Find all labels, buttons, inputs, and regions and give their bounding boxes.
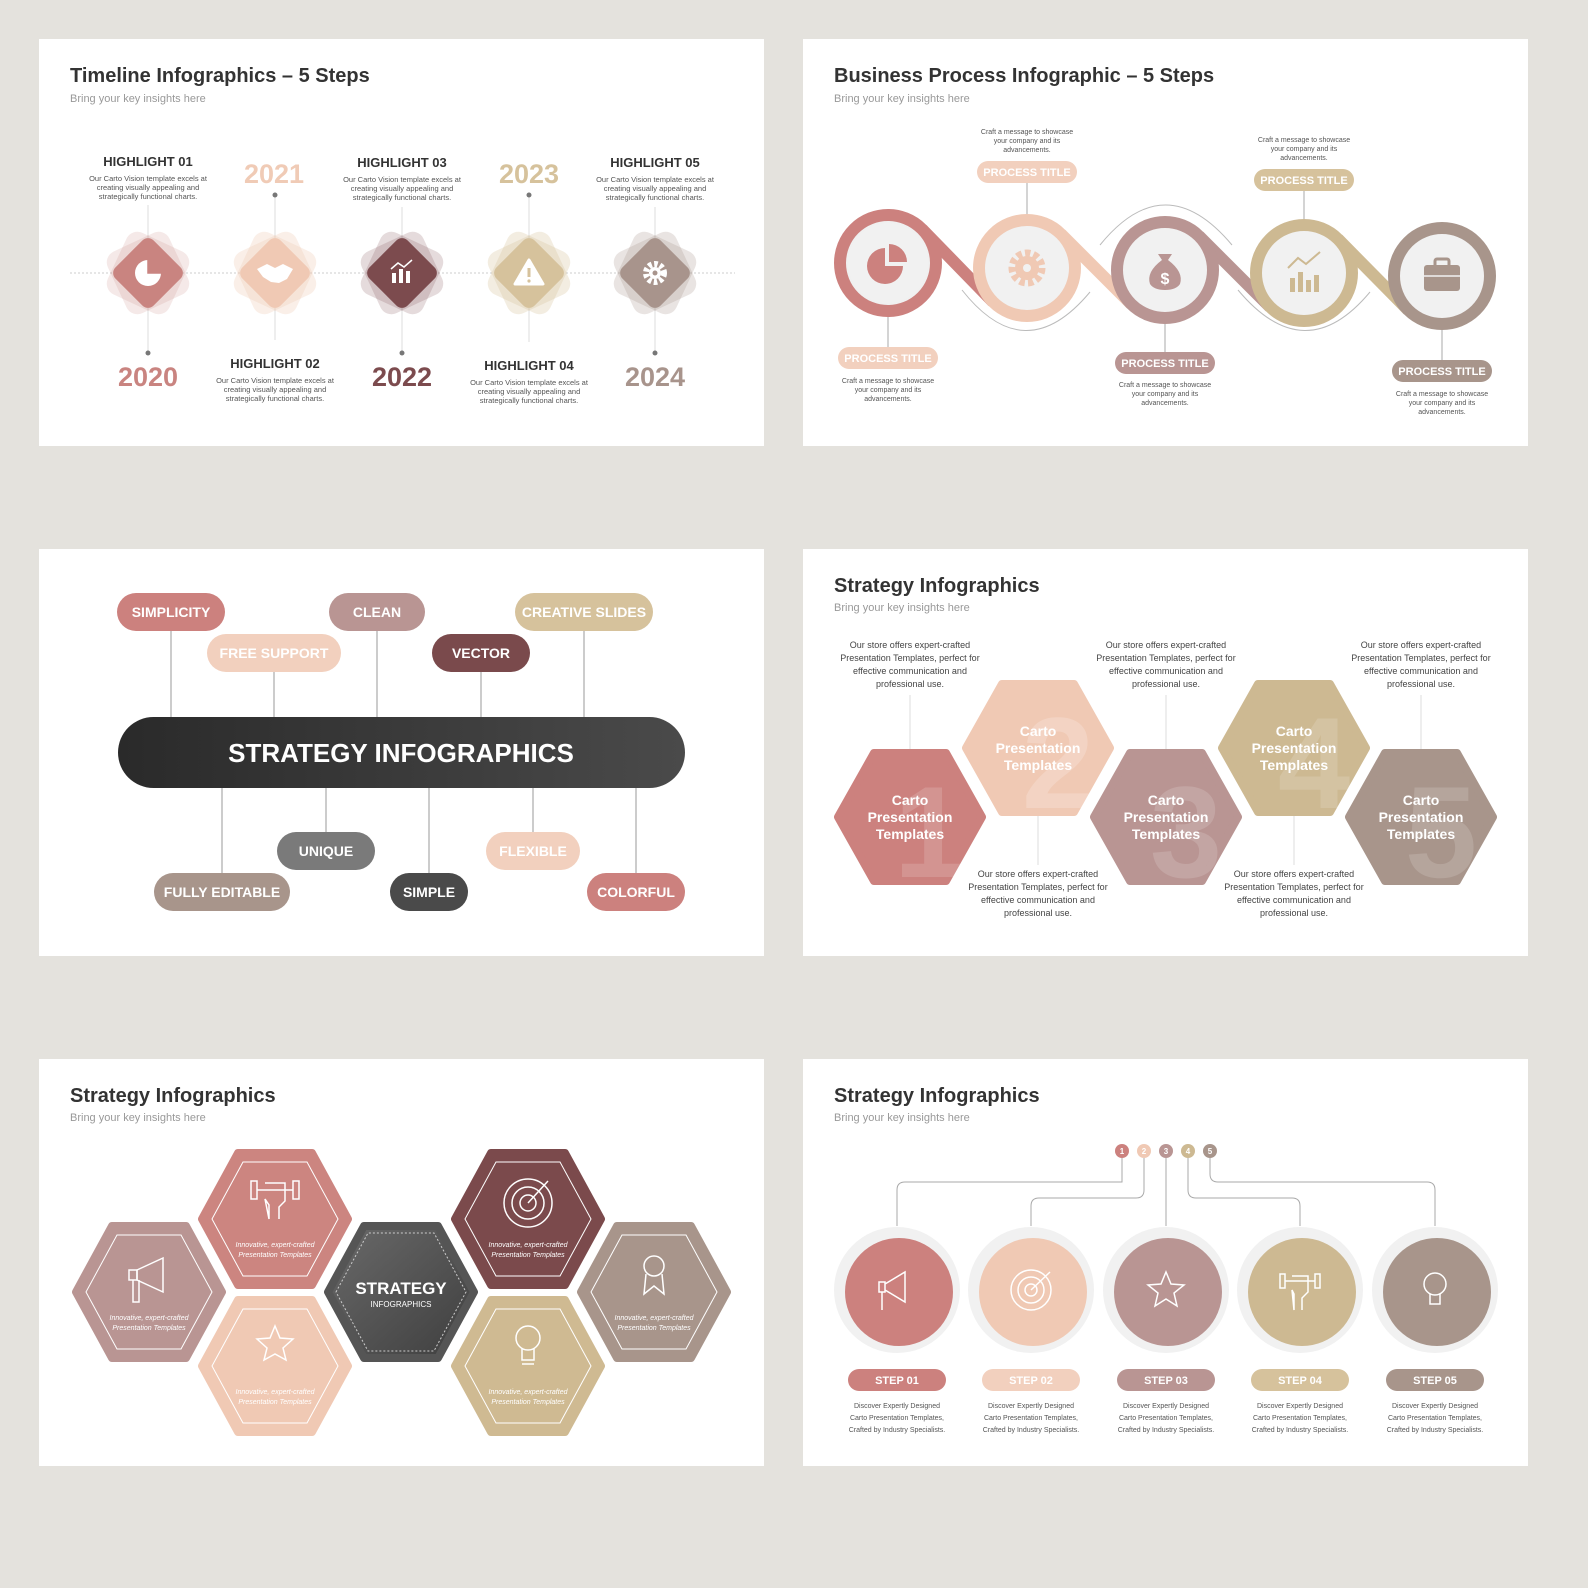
circle 2 — [979, 220, 1075, 316]
step 3: strategically functional charts. — [353, 193, 451, 202]
labels: process: advancements. — [864, 396, 912, 403]
labels: process: advancements. — [1280, 155, 1328, 162]
number dots: 2 — [1142, 1147, 1147, 1156]
title: strategy: Strategy Infographics — [834, 575, 1040, 597]
title: business process: Business Process Infographic – 5 Steps — [834, 65, 1214, 87]
panel: strategy steps: Bring your key insights here — [834, 1112, 970, 1124]
step pills: STEP 03 — [1144, 1375, 1188, 1387]
hexagons: 3 — [1150, 759, 1222, 905]
panel: strategy honeycomb — [39, 1059, 764, 1466]
circle 5 — [1394, 228, 1490, 324]
pills — [117, 593, 685, 911]
step 1 — [89, 154, 208, 392]
step 5: Our Carto Vision template excels at — [596, 175, 715, 184]
step 5: creating visually appealing and — [604, 184, 706, 193]
labels: process: PROCESS TITLE — [1260, 175, 1348, 187]
central bar: STRATEGY INFOGRAPHICS — [228, 738, 574, 768]
labels: process: your company and its — [1271, 146, 1338, 153]
pills: SIMPLE — [403, 884, 455, 900]
labels: process: Craft a message to showcase — [1396, 391, 1488, 398]
step 3 — [343, 155, 462, 392]
step 1: strategically functional charts. — [99, 192, 197, 201]
circle 3: $ — [1161, 271, 1170, 288]
hexagons: Templates — [1387, 826, 1455, 842]
hex left: Presentation Templates — [112, 1325, 186, 1332]
panel: strategy steps: Discover Expertly Designed — [1257, 1403, 1343, 1410]
step 4: HIGHLIGHT 04 — [484, 358, 575, 373]
step 2: creating visually appealing and — [224, 385, 326, 394]
hexagons: Carto — [1276, 723, 1312, 739]
hex bottom-right — [455, 1300, 601, 1432]
hex bottom-left: Presentation Templates — [238, 1399, 312, 1406]
panel: strategy steps: Carto Presentation Templates, — [850, 1415, 944, 1422]
circle 4 — [1256, 225, 1352, 321]
labels: process: advancements. — [1003, 147, 1051, 154]
labels: process: PROCESS TITLE — [844, 353, 932, 365]
number dots — [1115, 1144, 1217, 1158]
hex top-left: Presentation Templates — [238, 1252, 312, 1259]
panel: timeline — [39, 39, 764, 446]
hex center: INFOGRAPHICS — [371, 1300, 431, 1309]
hex right: Innovative, expert-crafted — [614, 1315, 695, 1322]
number dots: 5 — [1208, 1147, 1213, 1156]
hexagons: 1 — [894, 759, 966, 905]
hexagons: Carto — [1020, 723, 1056, 739]
labels: process: Craft a message to showcase — [842, 378, 934, 385]
hexagons: Carto — [1148, 792, 1184, 808]
descriptions: effective communication and — [981, 895, 1095, 905]
panel: strategy honeycomb: Bring your key insights here — [70, 1112, 206, 1124]
panel: strategy steps: Discover Expertly Designed — [854, 1403, 940, 1410]
hexagons: Carto — [892, 792, 928, 808]
descriptions: Presentation Templates, perfect for — [1224, 882, 1364, 892]
step 5: strategically functional charts. — [606, 193, 704, 202]
panel: strategy steps: Discover Expertly Designed — [1123, 1403, 1209, 1410]
step 5 — [596, 155, 715, 392]
panel: strategy pills — [39, 549, 764, 956]
descriptions — [840, 640, 1491, 918]
hexagons: Templates — [1132, 826, 1200, 842]
descriptions: Our store offers expert-crafted — [1106, 640, 1226, 650]
hex bottom-right: Innovative, expert-crafted — [488, 1389, 569, 1396]
number dots: 1 — [1120, 1147, 1125, 1156]
step 4 — [470, 159, 589, 405]
step 2: Our Carto Vision template excels at — [216, 376, 335, 385]
hex left: Innovative, expert-crafted — [110, 1315, 190, 1322]
subtitle: timeline: Bring your key insights here — [70, 93, 206, 105]
circle 1 — [840, 215, 936, 311]
hex left — [76, 1226, 222, 1358]
hex top-right — [455, 1153, 601, 1285]
step 1: 2020 — [118, 362, 178, 392]
labels: process: PROCESS TITLE — [983, 167, 1071, 179]
pills: CREATIVE SLIDES — [522, 604, 646, 620]
panel: strategy steps: Crafted by Industry Specialists. — [1252, 1427, 1348, 1434]
step 5: HIGHLIGHT 05 — [610, 155, 700, 170]
panel: strategy steps: Crafted by Industry Specialists. — [983, 1427, 1079, 1434]
title: timeline: Timeline Infographics – 5 Steps — [70, 65, 370, 87]
step 4: 2023 — [499, 159, 559, 189]
step 2 — [216, 159, 335, 403]
hex top-left — [202, 1153, 348, 1285]
hex center — [328, 1226, 474, 1358]
hexagons: 5 — [1405, 759, 1477, 905]
descriptions: Our store offers expert-crafted — [978, 869, 1098, 879]
number dots: 4 — [1186, 1147, 1191, 1156]
step pills: STEP 05 — [1413, 1375, 1457, 1387]
panel: strategy steps: Carto Presentation Templates, — [984, 1415, 1078, 1422]
title: steps: Strategy Infographics — [834, 1085, 1040, 1107]
hex bottom-left: Innovative, expert-crafted — [236, 1389, 316, 1396]
step pills: STEP 01 — [875, 1375, 919, 1387]
descriptions: professional use. — [876, 679, 944, 689]
hexagons: Templates — [876, 826, 944, 842]
arcs — [962, 205, 1370, 331]
descriptions: Our store offers expert-crafted — [1234, 869, 1354, 879]
hexagons — [838, 684, 1493, 905]
central bar — [118, 717, 685, 788]
subtitle: business process: Bring your key insights here — [834, 93, 970, 105]
step 4: strategically functional charts. — [480, 396, 578, 405]
step 2: strategically functional charts. — [226, 394, 324, 403]
panel: strategy steps: Discover Expertly Designed — [1392, 1403, 1478, 1410]
labels: process: Craft a message to showcase — [1119, 382, 1211, 389]
hexagons: Presentation — [1252, 740, 1336, 756]
step 3: 2022 — [372, 362, 432, 392]
number dots: 3 — [1164, 1147, 1169, 1156]
descriptions: effective communication and — [853, 666, 967, 676]
hex top-right: Presentation Templates — [491, 1252, 565, 1259]
labels: process — [838, 129, 1492, 416]
step pills — [848, 1369, 1484, 1391]
hexagons: Presentation — [1124, 809, 1208, 825]
pills: COLORFUL — [597, 884, 675, 900]
hexagons: Presentation — [996, 740, 1080, 756]
pills: VECTOR — [452, 645, 510, 661]
hexagons: Presentation — [868, 809, 952, 825]
pills: UNIQUE — [299, 843, 353, 859]
labels: process: your company and its — [994, 138, 1061, 145]
panel: strategy hexagons 5: Bring your key insights here — [834, 602, 970, 614]
pills: FULLY EDITABLE — [164, 884, 280, 900]
descriptions: professional use. — [1387, 679, 1455, 689]
step 4: Our Carto Vision template excels at — [470, 378, 589, 387]
labels: process: advancements. — [1141, 400, 1189, 407]
step pills: STEP 02 — [1009, 1375, 1053, 1387]
panel: business process — [803, 39, 1528, 446]
hexagons: Templates — [1260, 757, 1328, 773]
step 2: HIGHLIGHT 02 — [230, 356, 320, 371]
hexagons: 4 — [1278, 690, 1350, 836]
step 2: 2021 — [244, 159, 304, 189]
circle 3 — [1117, 222, 1213, 318]
pills: FLEXIBLE — [499, 843, 567, 859]
descriptions: Presentation Templates, perfect for — [1096, 653, 1236, 663]
panel: strategy steps: Crafted by Industry Specialists. — [849, 1427, 945, 1434]
hexagons: Templates — [1004, 757, 1072, 773]
panel: strategy hexagons 5 — [803, 549, 1528, 956]
panel: strategy steps — [803, 1059, 1528, 1466]
labels: process: your company and its — [855, 387, 922, 394]
descriptions: Our store offers expert-crafted — [1361, 640, 1481, 650]
descriptions: Presentation Templates, perfect for — [1351, 653, 1491, 663]
step 3: HIGHLIGHT 03 — [357, 155, 447, 170]
hex top-left: Innovative, expert-crafted — [236, 1242, 316, 1249]
labels: process: Craft a message to showcase — [981, 129, 1073, 136]
pills: CLEAN — [353, 604, 401, 620]
hex right: Presentation Templates — [617, 1325, 691, 1332]
pills: SIMPLICITY — [132, 604, 211, 620]
descriptions: Presentation Templates, perfect for — [968, 882, 1108, 892]
labels: process: your company and its — [1132, 391, 1199, 398]
labels: process: PROCESS TITLE — [1121, 358, 1209, 370]
panel: strategy steps: Crafted by Industry Specialists. — [1387, 1427, 1483, 1434]
descriptions: Our store offers expert-crafted — [850, 640, 970, 650]
step 4: creating visually appealing and — [478, 387, 580, 396]
step 1: Our Carto Vision template excels at — [89, 174, 208, 183]
descriptions: professional use. — [1260, 908, 1328, 918]
hex bottom-left — [202, 1300, 348, 1432]
panel: strategy steps: Carto Presentation Templates, — [1119, 1415, 1213, 1422]
descriptions: professional use. — [1132, 679, 1200, 689]
labels: process: PROCESS TITLE — [1398, 366, 1486, 378]
connectors — [922, 229, 1408, 310]
step circles — [834, 1227, 1498, 1353]
panel: strategy steps: Carto Presentation Templates, — [1388, 1415, 1482, 1422]
panel: strategy steps: Discover Expertly Designed — [988, 1403, 1074, 1410]
hex center: STRATEGY — [355, 1279, 447, 1298]
hexagons: Carto — [1403, 792, 1439, 808]
step 3: Our Carto Vision template excels at — [343, 175, 462, 184]
descriptions: effective communication and — [1109, 666, 1223, 676]
descriptions: professional use. — [1004, 908, 1072, 918]
hex right — [581, 1226, 727, 1358]
title: honeycomb: Strategy Infographics — [70, 1085, 276, 1107]
labels: process: Craft a message to showcase — [1258, 137, 1350, 144]
step 5: 2024 — [625, 362, 685, 392]
descriptions: effective communication and — [1237, 895, 1351, 905]
hex top-right: Innovative, expert-crafted — [488, 1242, 569, 1249]
hexagons: Presentation — [1379, 809, 1463, 825]
step 1: creating visually appealing and — [97, 183, 199, 192]
descriptions: effective communication and — [1364, 666, 1478, 676]
hex bottom-right: Presentation Templates — [491, 1399, 565, 1406]
step 1: HIGHLIGHT 01 — [103, 154, 193, 169]
step 3: creating visually appealing and — [351, 184, 453, 193]
labels: process: advancements. — [1418, 409, 1466, 416]
descriptions: Presentation Templates, perfect for — [840, 653, 980, 663]
hexagons: 2 — [1022, 690, 1094, 836]
labels: process: your company and its — [1409, 400, 1476, 407]
panel: strategy steps: Crafted by Industry Specialists. — [1118, 1427, 1214, 1434]
panel: strategy steps: Carto Presentation Templates, — [1253, 1415, 1347, 1422]
step pills: STEP 04 — [1278, 1375, 1323, 1387]
pills: FREE SUPPORT — [220, 645, 329, 661]
